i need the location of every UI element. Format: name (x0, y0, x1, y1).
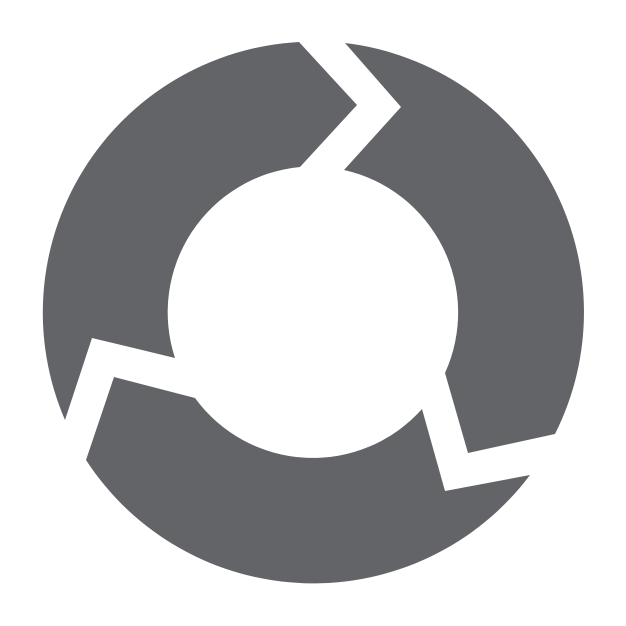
arrow segment: right (344, 43, 584, 453)
arrow segment: top left (43, 42, 357, 420)
arrow segment: bottom (86, 377, 530, 583)
